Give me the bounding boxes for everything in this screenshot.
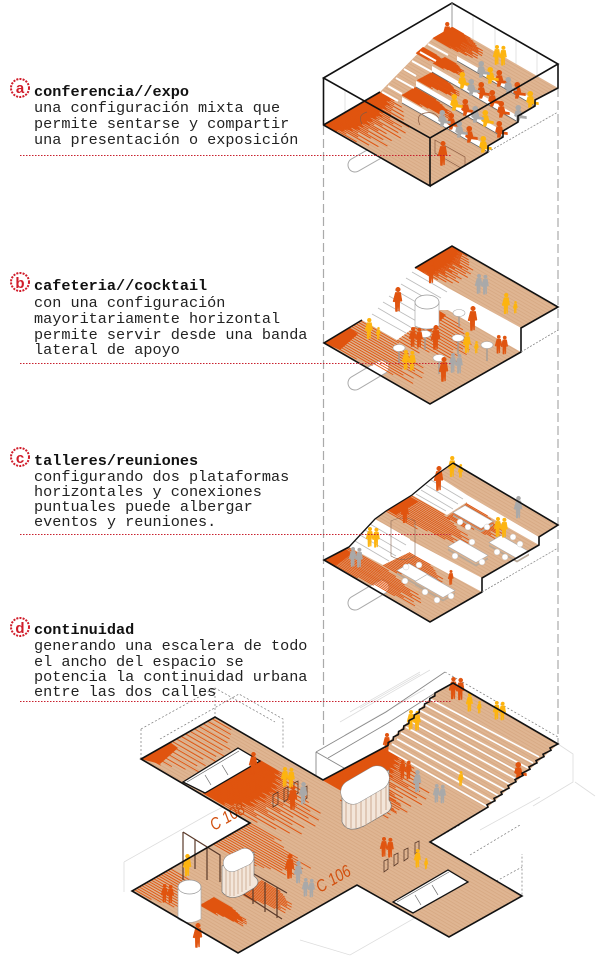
description: b: lateral de apoyo	[34, 341, 180, 359]
label: street C 108: C 108	[207, 800, 249, 835]
badge: c: c	[16, 450, 24, 467]
panel: b cafeteria cocktail axonometric	[324, 246, 558, 404]
description: b: con una configuración	[34, 294, 225, 312]
description: c: horizontales y conexiones	[34, 483, 262, 501]
ramp: oval outline panel a	[355, 153, 376, 165]
stair: white stepped flight panel b	[362, 268, 448, 340]
description: d: el ancho del espacio se	[34, 653, 244, 671]
leader lines: red dotted lines	[20, 156, 452, 702]
floor: lower platform panel b	[324, 310, 521, 404]
description: b: mayoritariamente horizontal	[34, 310, 280, 328]
label: street C 106: C 106	[313, 862, 355, 897]
floor: terraced platforms panel c	[324, 463, 558, 622]
outline: black plan edges	[132, 683, 558, 953]
opening: stair void lower-right arm	[393, 870, 468, 913]
hatching: orange streaks plan	[132, 719, 453, 928]
people: visitors plan	[161, 677, 526, 948]
description: b: permite servir desde una banda	[34, 326, 307, 344]
description: d: generando una escalera de todo	[34, 637, 307, 655]
description: d: entre las dos calles	[34, 683, 216, 701]
description: a: una configuración mixta que	[34, 99, 280, 117]
badge: b: b	[15, 275, 25, 292]
wall: white riser panel b	[448, 288, 521, 352]
cylinder: white volume panel b	[415, 295, 439, 329]
badge: c	[11, 448, 29, 467]
box: black wireframe panel a	[324, 3, 558, 186]
text block: c talleres reuniones	[11, 448, 289, 531]
stairs: white flights panel c	[349, 475, 467, 565]
walls: faint back wall lines panel a	[345, 14, 537, 116]
badge: d	[11, 618, 29, 637]
context: faint surrounding outlines	[124, 670, 595, 955]
description: c: configurando dos plataformas	[34, 468, 289, 486]
hatching: orange streaks panel b	[324, 246, 487, 389]
text block: a conferencia expo	[11, 79, 298, 149]
cylinder: faint outline panel c	[391, 518, 415, 560]
people: visitors panel b	[365, 261, 518, 382]
heading: cafeteria cocktail: cafeteria//cocktail	[34, 277, 207, 295]
description: a: permite sentarse y compartir	[34, 115, 289, 133]
guide: dashed vertical alignment lines	[324, 88, 558, 745]
badge: b	[11, 273, 29, 292]
badge: a: a	[16, 80, 25, 97]
hatching: orange streaks panel c	[324, 496, 511, 609]
ramp: oval panel c	[355, 587, 382, 603]
badge: d: d	[15, 620, 25, 637]
description: a: una presentación o exposición	[34, 131, 298, 149]
steps: white risers panel a	[382, 44, 535, 152]
opening: stair void upper-left arm	[183, 748, 260, 793]
heading: conferencia expo: conferencia//expo	[34, 83, 189, 101]
floor: upper platform panel b	[415, 246, 558, 328]
walls: white risers panel c	[467, 495, 539, 545]
furniture: thin outlines panel a	[360, 112, 465, 168]
tables: round high tables panel b	[393, 310, 493, 374]
text block: b cafeteria cocktail	[11, 273, 307, 359]
heading: continuidad: continuidad	[34, 621, 134, 639]
badge: a	[11, 79, 29, 97]
description: c: puntuales puede albergar	[34, 498, 253, 516]
description: d: potencia la continuidad urbana	[34, 668, 307, 686]
heading: talleres reuniones: talleres/reuniones	[34, 452, 198, 470]
description: c: eventos y reuniones.	[34, 513, 216, 531]
cylinder: white round volume	[178, 880, 201, 922]
outline: black edges panel b	[324, 246, 558, 404]
floor: cross-shaped plan	[132, 683, 558, 953]
panel: d continuidad large cross-shaped plan	[124, 670, 595, 955]
people: visitors panel c	[349, 456, 522, 585]
stairs: white treads plan	[388, 698, 539, 807]
hatching: orange streaks panel a	[324, 27, 492, 154]
panel: c talleres reuniones axonometric	[324, 456, 558, 622]
glazing: dark frames lower arm	[183, 781, 419, 919]
volume: small oval booth	[222, 852, 258, 898]
text block: d continuidad	[11, 618, 307, 701]
volume: large oval booth	[342, 770, 391, 829]
people: audience panel a	[438, 22, 538, 166]
tables: white workshop tables and stools panel c	[397, 506, 529, 603]
outline: black edges panel c	[324, 463, 558, 622]
floor: stepped terraces panel a	[324, 27, 558, 186]
panel: a conferencia expo axonometric	[324, 3, 558, 186]
ramp: oval panel b	[355, 367, 382, 383]
